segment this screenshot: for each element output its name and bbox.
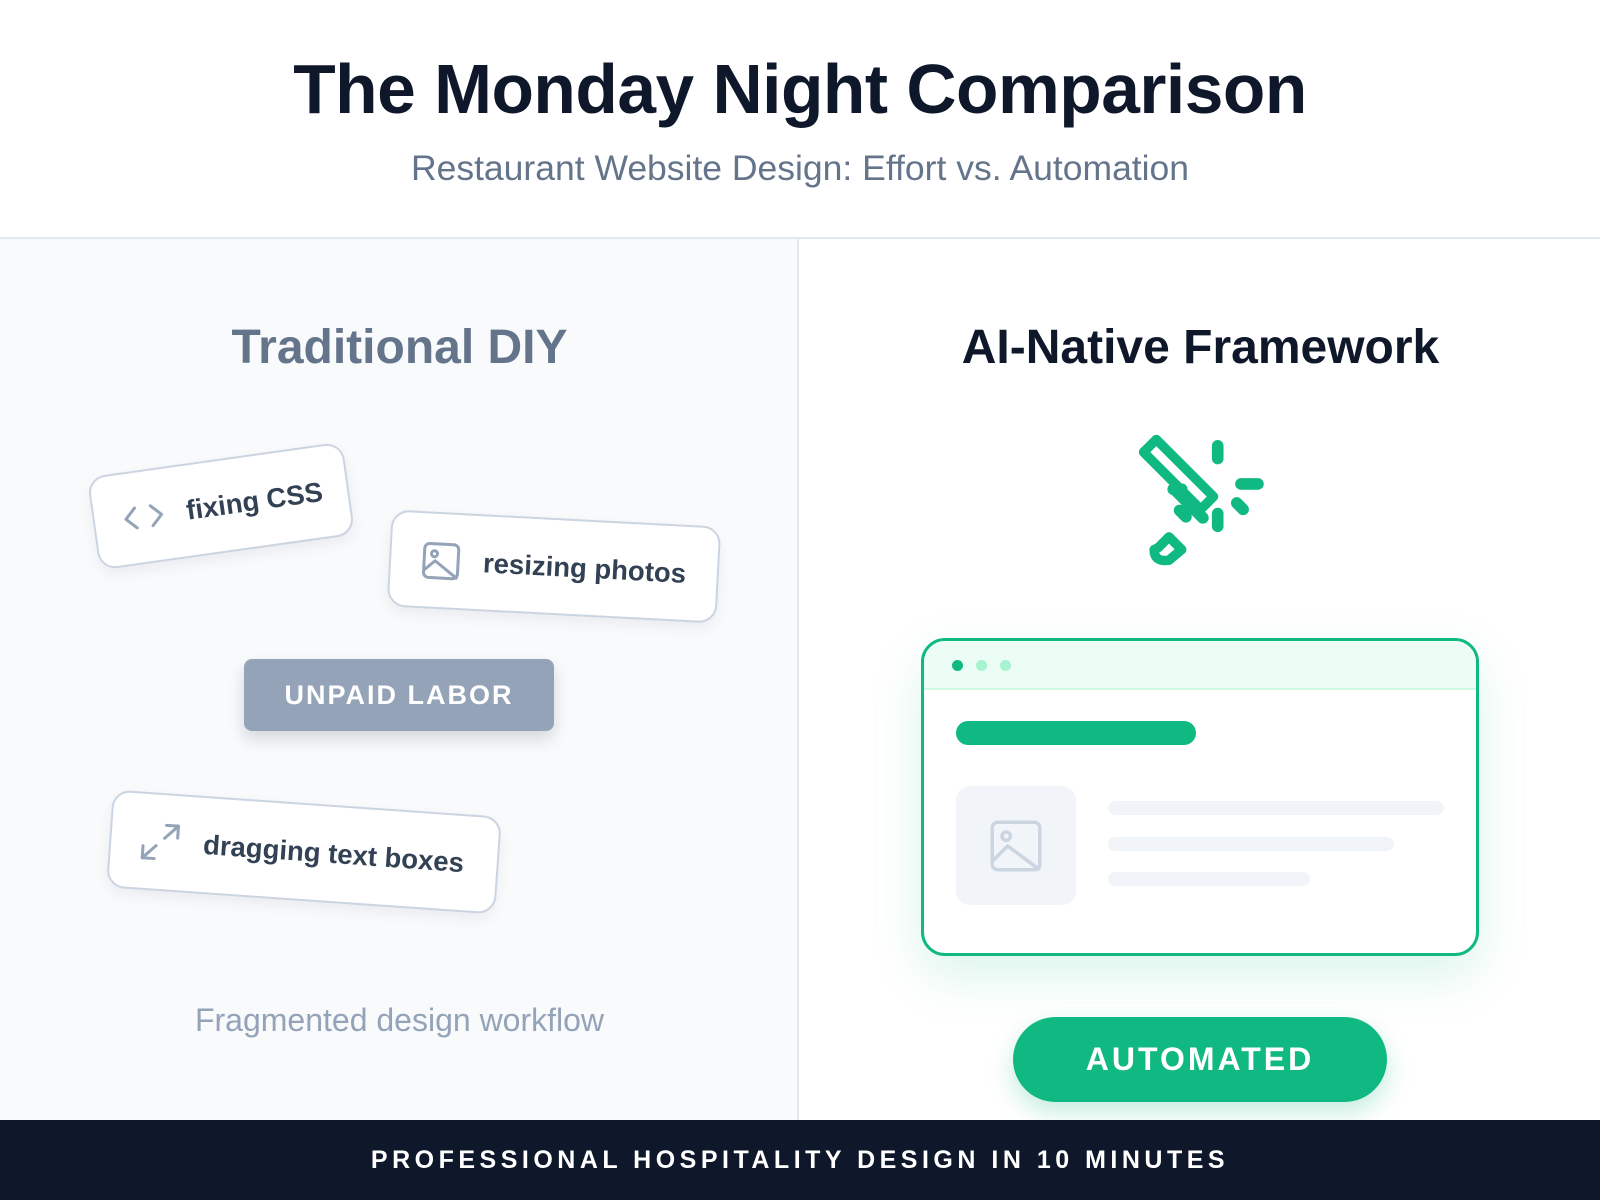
header bbox=[0, 0, 1600, 239]
label: automated bbox=[1013, 1017, 1387, 1102]
image placeholder bbox=[956, 786, 1076, 905]
label: automated: AUTOMATED bbox=[1086, 1041, 1314, 1077]
icon: magic wand bbox=[1138, 434, 1264, 566]
icon: resize arrows bbox=[140, 824, 180, 860]
caption: fragmented workflow: Fragmented design workflow bbox=[195, 1002, 604, 1038]
footer: PROFESSIONAL HOSPITALITY DESIGN IN 10 MINUTES bbox=[371, 1146, 1229, 1174]
footer bbox=[0, 1120, 1600, 1200]
card: fixing CSS: fixing CSS bbox=[184, 476, 325, 526]
label: unpaid labor bbox=[244, 659, 554, 731]
card: resizing photos bbox=[387, 509, 721, 624]
subtitle: Restaurant Website Design: Effort vs. Automation bbox=[411, 148, 1189, 188]
card: dragging text boxes bbox=[106, 790, 502, 914]
panel: AI-native framework bbox=[801, 239, 1600, 1120]
heading: AI-Native Framework: AI-Native Framework bbox=[962, 321, 1439, 374]
card: resizing photos: resizing photos bbox=[482, 547, 687, 588]
headline bar bbox=[956, 721, 1196, 745]
title: The Monday Night Comparison bbox=[293, 50, 1307, 128]
heading: Traditional DIY: Traditional DIY bbox=[231, 321, 568, 374]
panel: traditional DIY bbox=[0, 239, 799, 1120]
text lines bbox=[1108, 801, 1444, 815]
browser mockup bbox=[921, 638, 1479, 956]
label: unpaid labor: UNPAID LABOR bbox=[284, 680, 514, 710]
icon: code brackets bbox=[124, 504, 164, 530]
icon: image bbox=[422, 542, 460, 580]
browser header bar bbox=[924, 641, 1476, 690]
card: dragging text boxes: dragging text boxes bbox=[202, 829, 465, 878]
card: fixing CSS bbox=[87, 442, 355, 570]
